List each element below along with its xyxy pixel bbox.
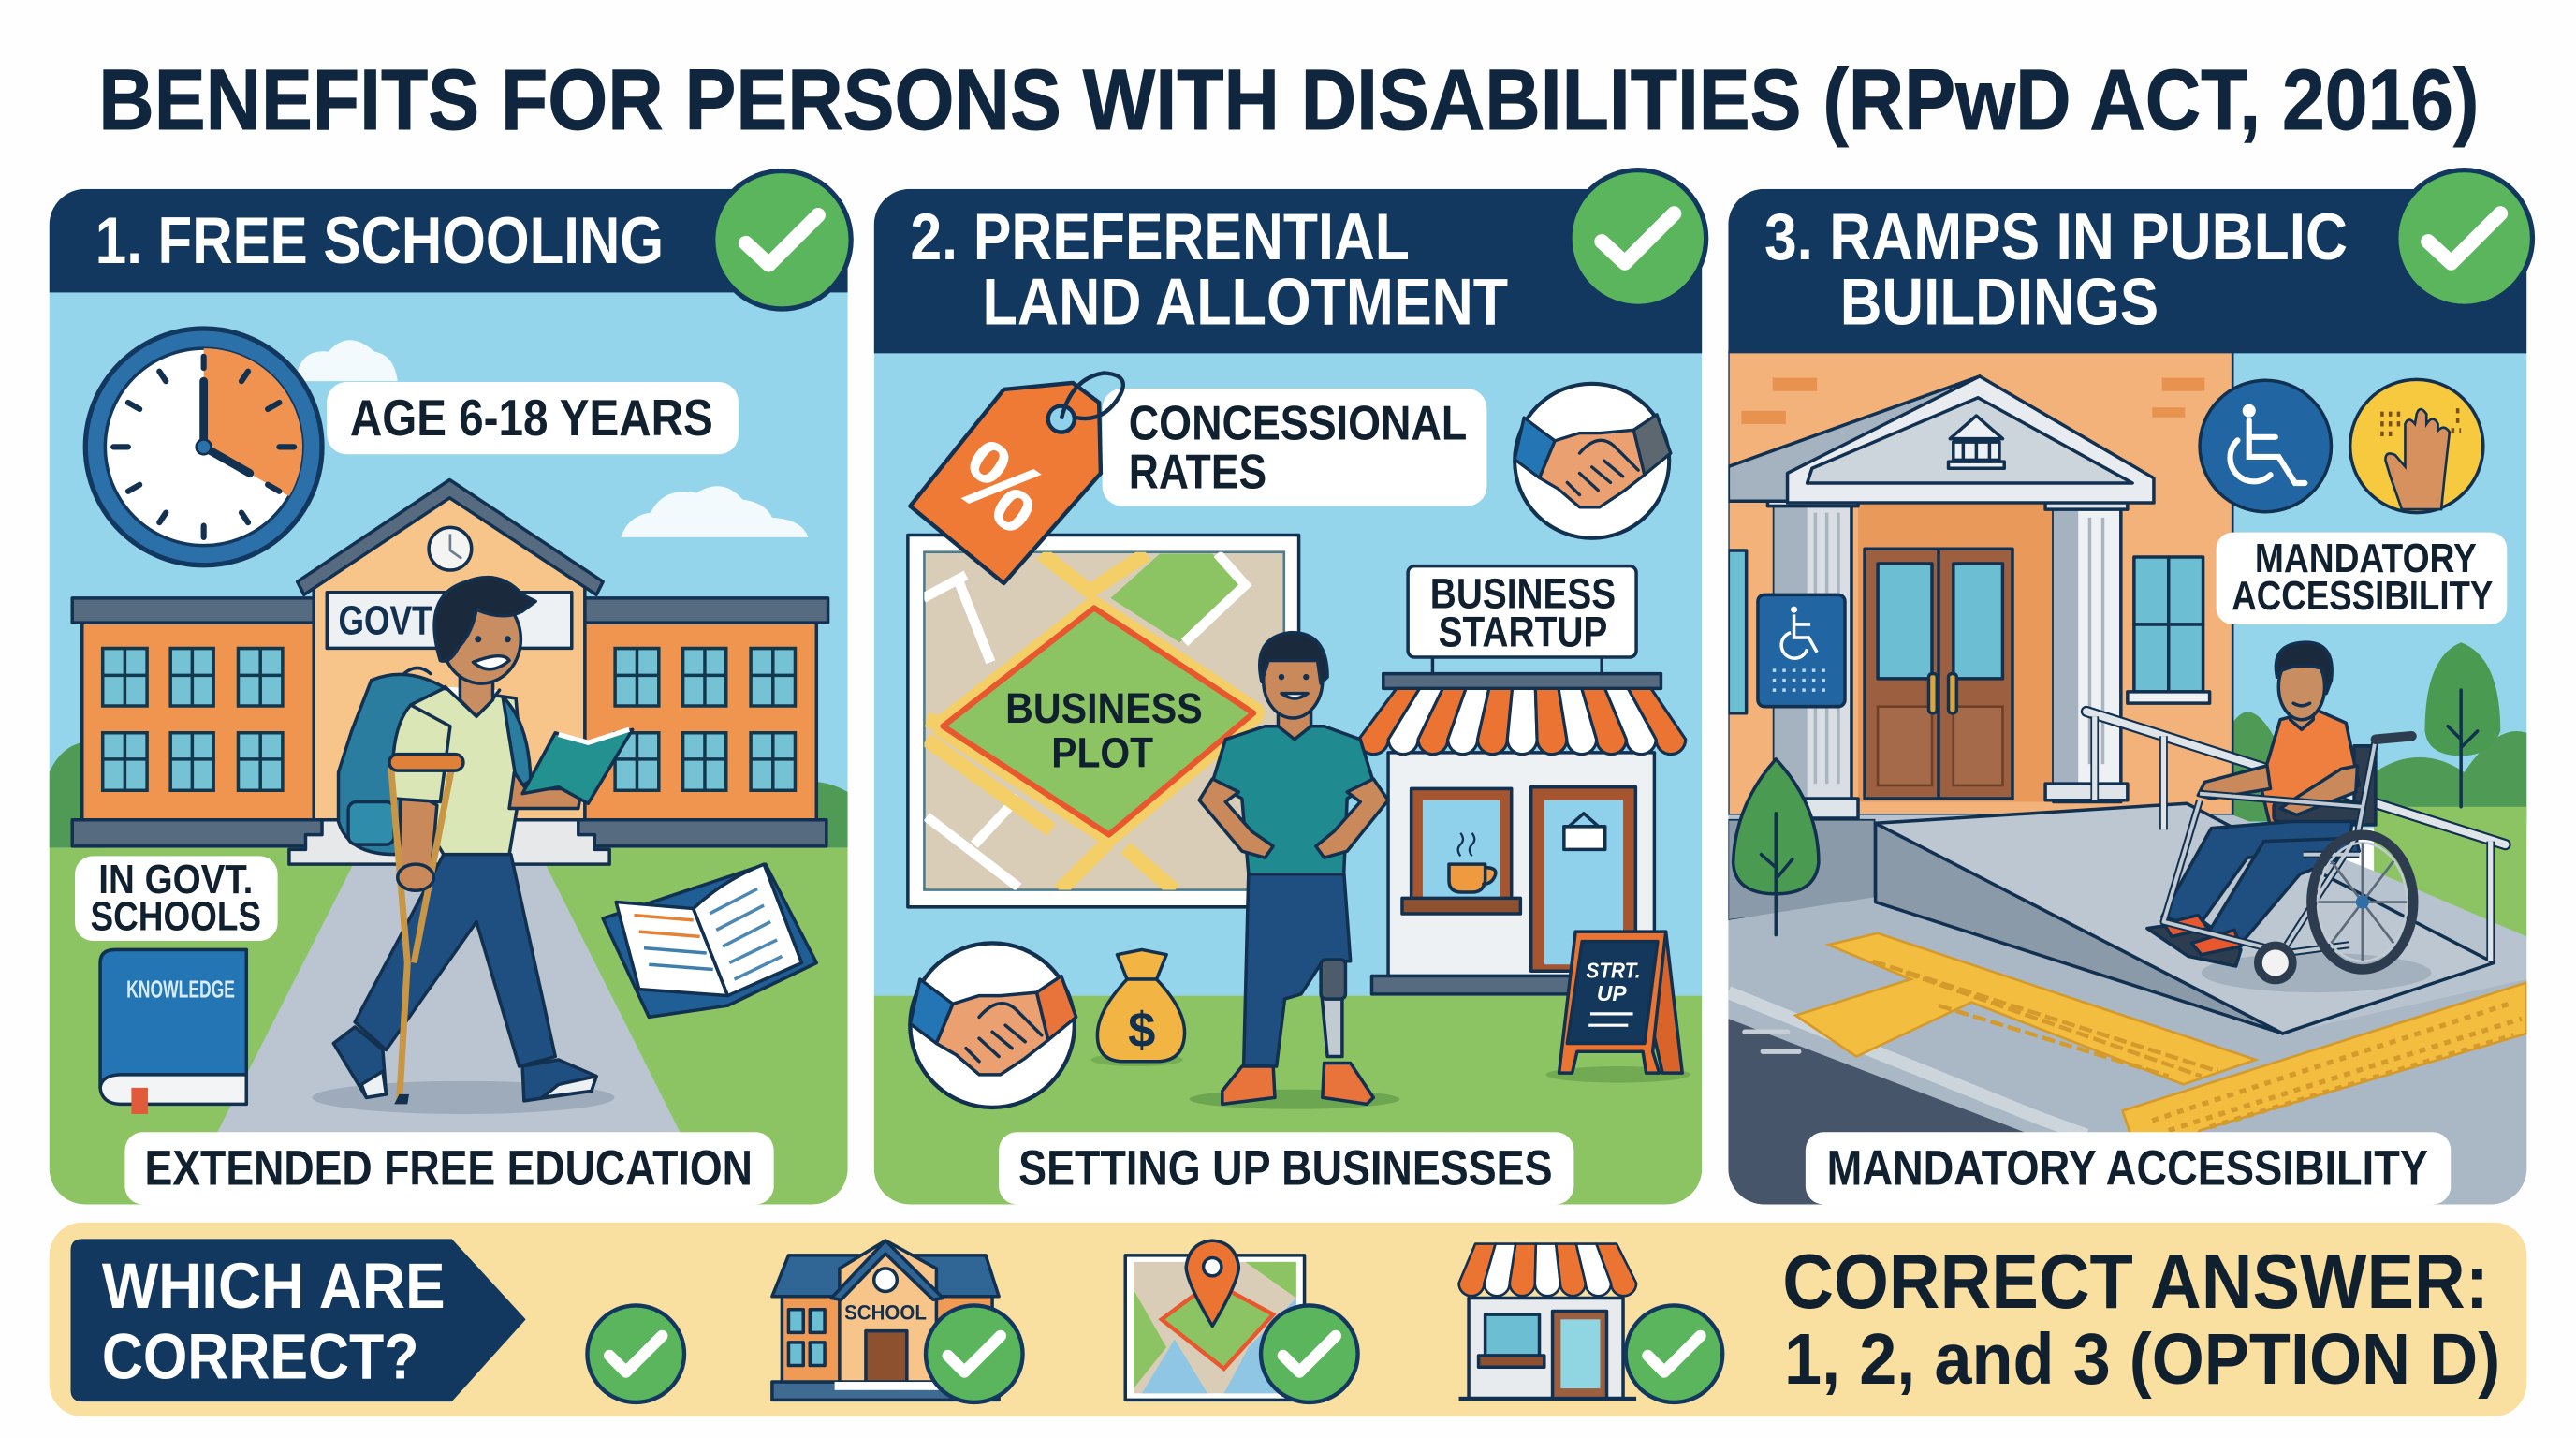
business plot map: PLOT	[1051, 729, 1153, 777]
head	[460, 677, 493, 716]
student on crutch with backpack and book	[312, 578, 633, 1114]
icon: mini school: SCHOOL	[844, 1300, 927, 1324]
arm to crutch	[399, 800, 439, 867]
grass	[874, 996, 1702, 1204]
panel heading: 2. preferential land allotment: LAND ALLOTMENT	[983, 265, 1508, 339]
ramp handrails	[2086, 712, 2506, 961]
question arrow tag: WHICH ARE	[102, 1250, 446, 1322]
sandwich board: start up	[1546, 932, 1690, 1083]
label: in govt. schools: IN GOVT.	[98, 857, 253, 902]
shoes	[333, 1027, 386, 1097]
distant hills	[50, 741, 848, 848]
crutch	[391, 768, 452, 1104]
label: concessional rates: CONCESSIONAL	[1129, 395, 1467, 449]
accessible braille sign	[1758, 594, 1845, 707]
torso	[1212, 726, 1373, 874]
door	[1531, 787, 1635, 971]
legs	[2162, 816, 2352, 927]
chair frame	[2163, 740, 2376, 953]
business plot map	[908, 535, 1299, 907]
hedge and grass	[2232, 712, 2526, 822]
sky	[2232, 352, 2526, 829]
label: in govt. schools: SCHOOLS	[91, 893, 261, 939]
panel heading: 2. preferential land allotment	[910, 199, 1508, 339]
shoes	[1222, 1066, 1275, 1104]
icon: percent price tag: %	[936, 418, 1066, 554]
panel: ramps in public buildings	[1728, 170, 2532, 1204]
icon: mini school	[772, 1240, 999, 1400]
bottom answer strip	[50, 1223, 2526, 1416]
icon: knowledge book: KNOWLEDGE	[126, 976, 235, 1003]
pediment emblem	[1949, 416, 2004, 468]
panel: free schooling	[50, 171, 851, 1204]
label: mandatory accessibility bottom: MANDATORY ACCESSIBILITY	[1827, 1140, 2428, 1196]
sandwich board: start up: STRT.	[1587, 958, 1640, 982]
correct answer text: CORRECT ANSWER:	[1782, 1239, 2489, 1325]
label: mandatory accessibility upper: MANDATORY	[2255, 536, 2477, 581]
icon: check alone	[587, 1305, 684, 1402]
label: mandatory accessibility upper: ACCESSIBILITY	[2232, 573, 2493, 619]
grass	[50, 848, 848, 1204]
clouds	[296, 340, 809, 537]
icon: braille hand	[2350, 379, 2483, 513]
shop with awning: BUSINESS	[1430, 569, 1616, 617]
icon: wheelchair symbol	[2200, 380, 2331, 512]
question arrow tag: CORRECT?	[102, 1321, 419, 1393]
icon: knowledge book	[100, 949, 246, 1114]
panel heading: 3. ramps in public buildings	[1764, 199, 2348, 339]
awning	[1358, 688, 1686, 755]
business plot map: BUSINESS	[1005, 684, 1203, 732]
orange building wall	[1728, 352, 2232, 815]
caster wheel	[2258, 946, 2292, 980]
label: extended free education: EXTENDED FREE EDUCATION	[144, 1140, 753, 1196]
icon: mini map with pin	[1125, 1240, 1305, 1400]
correct answer text: 1, 2, and 3 (OPTION D)	[1784, 1319, 2500, 1400]
public building entrance	[1728, 376, 2210, 818]
seat cushion	[2274, 801, 2363, 822]
pants	[355, 855, 555, 1066]
panel: preferential land allotment	[874, 170, 1706, 1204]
left leg	[1244, 871, 1351, 1066]
clock	[85, 329, 322, 565]
label: setting up businesses: SETTING UP BUSINESSES	[1018, 1140, 1553, 1196]
school windows	[103, 649, 795, 790]
columns	[1775, 501, 1852, 814]
panel heading: 3. ramps in public buildings: BUILDINGS	[1840, 265, 2159, 339]
icon: check on map	[1261, 1305, 1358, 1402]
person in wheelchair	[2147, 642, 2432, 992]
arms	[1199, 779, 1273, 858]
header band	[50, 189, 848, 292]
backpack	[337, 672, 444, 856]
right tree	[2425, 642, 2500, 807]
seat back	[2354, 746, 2376, 825]
icon: check on school	[926, 1305, 1023, 1402]
wheelchair ramp	[1876, 803, 2494, 1034]
icon: money bag: $	[1128, 1003, 1155, 1058]
torso	[404, 688, 522, 855]
shop with awning	[1358, 566, 1686, 994]
neck and head	[1278, 707, 1311, 740]
shop with awning: STARTUP	[1439, 608, 1607, 655]
icon: mini shop	[1459, 1244, 1636, 1401]
shoes	[2163, 916, 2208, 936]
panel heading: 1. free schooling: 1. FREE SCHOOLING	[95, 203, 664, 277]
sandwich board: start up: UP	[1597, 981, 1627, 1005]
school building	[72, 479, 828, 864]
icon: handshake bottom left	[910, 943, 1076, 1108]
label: age 6-18 years: AGE 6-18 YEARS	[350, 389, 713, 447]
icon: money bag	[1090, 949, 1185, 1066]
road	[1728, 1019, 2136, 1204]
header band	[1728, 189, 2526, 353]
head	[2291, 703, 2313, 729]
label: extended free education	[124, 1132, 774, 1204]
question arrow tag	[70, 1239, 526, 1401]
label: concessional rates	[1103, 389, 1486, 506]
roof and pediment	[1728, 376, 1980, 501]
icon: check on shop	[1626, 1305, 1722, 1402]
icon: green check 1	[713, 171, 851, 309]
sky background	[50, 189, 848, 848]
right window	[2134, 557, 2203, 692]
big wheel	[2311, 835, 2413, 970]
header band	[874, 189, 1702, 353]
pavement	[1728, 815, 2526, 1204]
label: setting up businesses	[999, 1132, 1573, 1204]
panel heading: 3. ramps in public buildings: 3. RAMPS IN PUBLIC	[1764, 199, 2348, 273]
left tree	[1734, 759, 1819, 935]
tactile paving	[1795, 933, 2526, 1151]
icon: percent price tag	[910, 373, 1123, 583]
man with prosthetic leg	[1190, 633, 1399, 1109]
icon: green check 2	[1570, 170, 1706, 306]
icon: green check 3	[2396, 170, 2532, 306]
school building: GOVT	[339, 597, 432, 643]
correct answer text	[1782, 1239, 2500, 1400]
label: mandatory accessibility upper	[2217, 533, 2507, 624]
footrest	[2147, 920, 2241, 966]
sky background	[874, 189, 1702, 996]
arms	[2198, 766, 2271, 799]
arm with book	[509, 772, 581, 809]
label: in govt. schools	[75, 856, 278, 941]
prosthetic leg	[1321, 986, 1342, 1057]
torso	[2261, 710, 2359, 827]
icon: open book	[603, 864, 816, 1017]
held teal book	[522, 729, 633, 803]
window	[1412, 788, 1512, 899]
panel heading: 2. preferential land allotment: 2. PREFERENTIAL	[910, 199, 1410, 273]
walkway	[217, 865, 680, 1133]
double door	[1865, 549, 2012, 799]
icon: handshake top right	[1515, 384, 1671, 538]
store sign	[1408, 566, 1636, 657]
label: concessional rates: RATES	[1129, 444, 1266, 498]
label: mandatory accessibility bottom	[1806, 1132, 2451, 1204]
